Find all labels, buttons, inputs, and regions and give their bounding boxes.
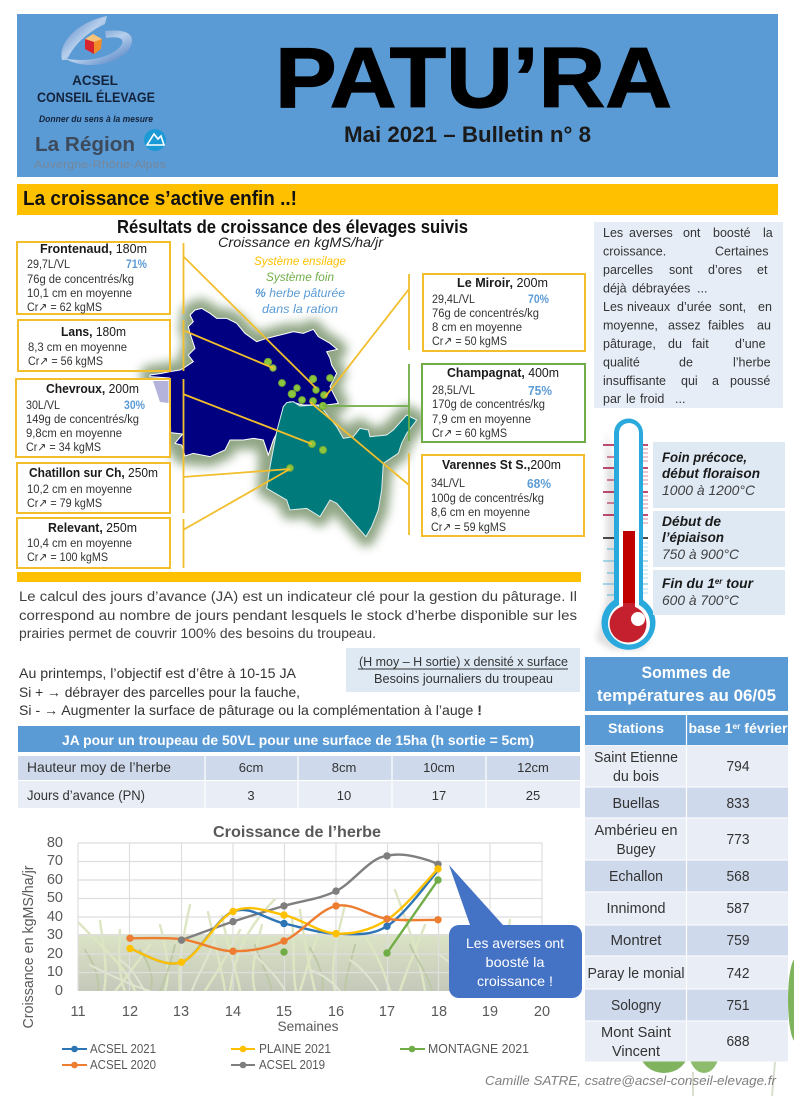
table: sommes de températures: températures au 06/05 bbox=[597, 686, 776, 705]
callout: averses: Les averses ont bbox=[466, 935, 564, 951]
farm card: Le Miroir bbox=[423, 274, 585, 351]
table: jours d'avance: Jours d’avance (PN) bbox=[27, 787, 145, 803]
farm card: Varennes St S.: 34L/VL bbox=[431, 478, 466, 490]
farm card: Le Miroir: 70% bbox=[528, 294, 549, 306]
chart legend: MONTAGNE 2021 bbox=[428, 1041, 529, 1056]
headline bar bbox=[17, 184, 778, 215]
growth stage: Fin du 1er tour: tour bbox=[722, 575, 755, 591]
growth stage: Début de l'épiaison: Début de bbox=[662, 513, 721, 529]
farm card: Lans: Cr↗ = 56 kgMS bbox=[28, 356, 103, 368]
farm card: Relevant bbox=[17, 518, 170, 568]
commentary panel: du bbox=[668, 337, 682, 351]
table: jours d'avance: Hauteur moy de l’herbe bbox=[27, 759, 171, 775]
table: sommes de températures: 587 bbox=[726, 901, 750, 917]
axis titles bbox=[21, 865, 338, 1034]
farm card: Varennes St S.: 8,6 cm en moyenne bbox=[431, 507, 530, 519]
series: ACSEL 2021 bbox=[130, 871, 438, 964]
table: jours d'avance: 25 bbox=[526, 788, 540, 803]
x axis labels: 19 bbox=[482, 1004, 498, 1020]
farm card: Le Miroir: 76g de concentrés/kg bbox=[432, 308, 539, 320]
commentary panel: sont, bbox=[719, 300, 746, 314]
table: jours d'avance: 10 bbox=[337, 788, 351, 803]
y axis labels: 10 bbox=[47, 964, 63, 980]
explanatory paragraph: Le calcul des jours d’avance (JA) est un indicateur clé pour la gestion du pâturage. Il bbox=[19, 589, 577, 604]
y axis labels: 20 bbox=[47, 946, 63, 962]
x axis labels: 15 bbox=[276, 1004, 292, 1020]
commentary panel: le bbox=[626, 392, 636, 406]
section heading: results bbox=[117, 217, 468, 250]
formula box: (H moy – H sortie) x densité x surface bbox=[359, 654, 568, 669]
divider bar bbox=[17, 572, 581, 582]
commentary panel: d’une bbox=[735, 337, 766, 351]
y axis labels: 80 bbox=[47, 835, 63, 851]
map legend bbox=[254, 254, 346, 316]
farm card: Varennes St S.: Cr↗ = 59 kgMS bbox=[431, 522, 506, 534]
growth stage: Foin précoce: 1000 à 1200°C bbox=[662, 482, 756, 498]
subtitle: Mai 2021 – Bulletin n° 8 bbox=[344, 122, 591, 147]
commentary panel: déjà bbox=[603, 282, 627, 296]
farm card: Le Miroir: Cr↗ = 50 kgMS bbox=[432, 336, 507, 348]
commentary panel: la bbox=[763, 226, 773, 240]
footer credit: Camille SATRE, csatre@acsel-conseil-elevage.fr bbox=[485, 1073, 777, 1088]
commentary panel: Les bbox=[603, 226, 623, 240]
formula box: Besoins journaliers du troupeau bbox=[374, 671, 553, 686]
grey marker at week 13 bbox=[178, 936, 185, 944]
commentary panel: croissance. bbox=[603, 244, 666, 258]
commentary panel: ... bbox=[697, 282, 707, 296]
table: sommes de températures: base 1 bbox=[688, 721, 731, 736]
farm card: Le Miroir: 8 cm en moyenne bbox=[432, 322, 522, 334]
map legend: Système ensilage bbox=[254, 254, 346, 268]
farm card: Chatillon sur Ch: Cr↗ = 79 kgMS bbox=[27, 498, 102, 510]
table: sommes de températures: 751 bbox=[726, 998, 750, 1014]
commentary panel: boosté bbox=[713, 226, 751, 240]
commentary panel: assez bbox=[668, 318, 701, 332]
commentary panel: débrayées bbox=[632, 282, 690, 296]
table: sommes de températures: Montret bbox=[610, 933, 662, 949]
chart legend bbox=[62, 1041, 529, 1072]
commentary panel: d’ores bbox=[708, 263, 742, 277]
thermometer bbox=[596, 418, 656, 650]
section heading: results: Résultats de croissance des élevages suivis bbox=[117, 217, 468, 237]
table: sommes de températures: er bbox=[732, 722, 740, 731]
gridlines bbox=[78, 843, 542, 991]
title: PATU’RA bbox=[275, 31, 672, 126]
logo: La Région Auvergne-Rhône-Alpes bbox=[34, 129, 167, 171]
section heading: results: Croissance en kgMS/ha/jr bbox=[218, 234, 384, 250]
table: sommes de températures: 688 bbox=[726, 1034, 750, 1050]
map legend: Système foin bbox=[266, 270, 334, 284]
growth stage: Foin précoce bbox=[653, 442, 785, 508]
growth stage: Fin du 1er tour: 600 à 700°C bbox=[662, 592, 740, 608]
chart legend: PLAINE 2021 bbox=[259, 1041, 331, 1056]
commentary panel: au bbox=[757, 318, 771, 332]
commentary panel: Les bbox=[603, 300, 623, 314]
growth stage: Foin précoce: début floraison bbox=[662, 465, 760, 481]
y axis labels: 70 bbox=[47, 853, 63, 869]
table: sommes de températures: février bbox=[740, 721, 788, 736]
table: jours d'avance bbox=[18, 726, 580, 808]
table: sommes de températures: 568 bbox=[726, 869, 750, 885]
commentary panel: en bbox=[758, 300, 772, 314]
farm card: Varennes St S.: 100g de concentrés/kg bbox=[431, 493, 544, 505]
series: MONTAGNE 2021 bbox=[280, 876, 442, 957]
x axis labels: 14 bbox=[225, 1004, 241, 1020]
commentary panel: Certaines bbox=[715, 244, 768, 258]
growth stage: Fin du 1er tour: Fin du 1 bbox=[662, 575, 716, 591]
commentary panel: a bbox=[712, 374, 719, 388]
farm card: Relevant: Cr↗ = 100 kgMS bbox=[27, 552, 108, 564]
commentary panel: sont bbox=[669, 263, 693, 277]
table: sommes de températures: Echallon bbox=[609, 869, 663, 885]
farm card: Champagnat: 75% bbox=[528, 383, 552, 398]
y axis labels: 60 bbox=[47, 872, 63, 888]
chart legend: ACSEL 2019 bbox=[259, 1057, 325, 1072]
y axis labels: 50 bbox=[47, 890, 63, 906]
commentary panel: ... bbox=[675, 392, 685, 406]
table: jours d'avance: 8cm bbox=[332, 760, 356, 775]
farm card: Chatillon sur Ch: 10,2 cm en moyenne bbox=[27, 484, 132, 496]
farm card: Chevroux: 149g de concentrés/kg bbox=[26, 414, 139, 426]
axis titles: Semaines bbox=[278, 1018, 338, 1034]
growth stage: Début de l'épiaison: l’épiaison bbox=[662, 529, 724, 545]
logo: ACSEL Conseil Élevage: ACSEL bbox=[72, 73, 118, 88]
chart legend: ACSEL 2021 bbox=[90, 1041, 156, 1056]
farm card: Lans: 8,3 cm en moyenne bbox=[28, 342, 127, 354]
commentary panel: qui bbox=[681, 374, 698, 388]
farm card: Frontenaud bbox=[17, 241, 170, 314]
farm card: Frontenaud: 29,7L/VL bbox=[27, 259, 71, 271]
line chart: croissance de l'herbe bbox=[21, 824, 550, 1072]
x axis labels: 11 bbox=[70, 1004, 86, 1020]
commentary panel: moyenne, bbox=[603, 318, 658, 332]
series: PLAINE 2021 bbox=[126, 865, 442, 966]
grass background bbox=[78, 890, 542, 991]
table: jours d'avance: 10cm bbox=[423, 760, 455, 775]
table: sommes de températures: Mont Saint bbox=[601, 1025, 671, 1041]
commentary panel: d’urée bbox=[677, 300, 712, 314]
farm card: Chevroux: 30% bbox=[124, 400, 145, 412]
commentary panel: froid bbox=[640, 392, 664, 406]
logo: ACSEL Conseil Élevage: CONSEIL ÉLEVAGE bbox=[37, 90, 155, 105]
callout: averses bbox=[449, 865, 582, 998]
logo: ACSEL Conseil Élevage bbox=[37, 16, 155, 124]
table: sommes de températures: 773 bbox=[726, 832, 750, 848]
table: jours d'avance: 17 bbox=[432, 788, 446, 803]
explanatory paragraph bbox=[19, 589, 577, 641]
farm card: Varennes St S.: 68% bbox=[527, 476, 551, 491]
commentary panel: niveaux bbox=[627, 300, 671, 314]
x axis labels: 12 bbox=[122, 1004, 138, 1020]
logo: La Région Auvergne-Rhône-Alpes: Auvergne-Rhône-Alpes bbox=[34, 159, 167, 171]
map legend: dans la ration bbox=[262, 302, 338, 316]
commentary panel: faibles bbox=[708, 318, 744, 332]
growth stage: Foin précoce: Foin précoce, bbox=[662, 449, 747, 465]
farm card: Chevroux: Chevroux, 200m bbox=[46, 381, 139, 396]
callout: averses: croissance ! bbox=[477, 973, 553, 989]
x axis labels: 18 bbox=[431, 1004, 447, 1020]
commentary panel: l’herbe bbox=[733, 356, 771, 370]
table: sommes de températures: Saint Etienne bbox=[594, 750, 678, 766]
objective text: Au printemps, l’objectif est d’être à 10-15 JA bbox=[19, 665, 297, 681]
headline bar: La croissance s’active enfin ..! bbox=[23, 188, 297, 210]
commentary panel: ont bbox=[683, 226, 701, 240]
farm card: Frontenaud: 76g de concentrés/kg bbox=[27, 274, 134, 286]
callout: averses: boosté la bbox=[486, 954, 545, 970]
chart title: Croissance de l’herbe bbox=[213, 824, 381, 841]
explanatory paragraph: prairies permet de couvrir 100% des besoins du troupeau. bbox=[19, 626, 376, 641]
farm card: Chevroux: 9,8cm en moyenne bbox=[26, 428, 122, 440]
farm card: Champagnat: Cr↗ = 60 kgMS bbox=[432, 428, 507, 440]
growth stage: Début de l'épiaison bbox=[653, 511, 785, 567]
axis titles: Croissance en kgMS/ha/jr bbox=[21, 865, 37, 1028]
table: sommes de températures: 742 bbox=[726, 966, 750, 982]
series: ACSEL 2019 bbox=[182, 852, 442, 940]
growth stage: Fin du 1er tour bbox=[653, 570, 785, 615]
table: jours d'avance: JA pour un troupeau de 50VL pour une surface de 15ha (h sortie = 5cm) bbox=[62, 732, 534, 748]
x axis labels: 20 bbox=[534, 1004, 550, 1020]
x axis labels: 17 bbox=[379, 1004, 395, 1020]
farm card: Frontenaud: 71% bbox=[126, 259, 147, 271]
farm card: Le Miroir: 29,4L/VL bbox=[432, 294, 476, 306]
commentary panel bbox=[594, 222, 783, 408]
table: sommes de températures: Bugey bbox=[616, 842, 656, 858]
farm card: Chevroux: 30L/VL bbox=[26, 400, 61, 412]
commentary panel: averses bbox=[629, 226, 673, 240]
map of the territory bbox=[150, 254, 417, 537]
chart legend: ACSEL 2020 bbox=[90, 1057, 156, 1072]
commentary panel: insuffisante bbox=[603, 374, 666, 388]
table: jours d'avance: 6cm bbox=[239, 760, 263, 775]
table: sommes de températures: Ambérieu en bbox=[594, 823, 678, 839]
lake showing through the card bbox=[153, 381, 168, 403]
farm card: Chatillon sur Ch: Chatillon sur Ch, 250m bbox=[29, 465, 158, 480]
farm card: Lans: Lans, 180m bbox=[61, 324, 126, 339]
table: sommes de températures: Buellas bbox=[612, 796, 660, 812]
y axis labels: 40 bbox=[47, 909, 63, 925]
farm card: Champagnat: 7,9 cm en moyenne bbox=[432, 414, 531, 426]
commentary panel: par bbox=[603, 392, 621, 406]
commentary panel: poussé bbox=[730, 374, 770, 388]
x axis labels: 13 bbox=[173, 1004, 189, 1020]
table: sommes de températures: Innimond bbox=[606, 901, 666, 917]
farm card: Chevroux: Cr↗ = 34 kgMS bbox=[26, 442, 101, 454]
connector lines bbox=[183, 243, 409, 568]
explanatory paragraph: correspond au nombre de jours pendant lesquels le stock d’herbe disponible sur les bbox=[19, 608, 577, 623]
map legend: % herbe pâturée bbox=[255, 286, 345, 300]
table: sommes de températures: 833 bbox=[726, 796, 750, 812]
farm card: Frontenaud: Frontenaud, 180m bbox=[40, 241, 147, 256]
table: sommes de températures: Stations bbox=[608, 720, 664, 736]
farm card: Le Miroir: Le Miroir, 200m bbox=[457, 275, 548, 290]
objective text: Si - → Augmenter la surface de pâturage ou la complémentation à l’auge ! bbox=[19, 702, 482, 718]
farm card: Champagnat bbox=[422, 364, 585, 442]
farm card: Lans bbox=[18, 320, 170, 371]
farm card: Chevroux bbox=[16, 379, 170, 457]
table: sommes de températures: du bois bbox=[613, 769, 659, 785]
farm card: Champagnat: 28,5L/VL bbox=[432, 385, 476, 397]
farm card: Frontenaud: 10,1 cm en moyenne bbox=[27, 288, 132, 300]
table: sommes de températures: 759 bbox=[726, 933, 750, 949]
farm card: Chatillon sur Ch bbox=[17, 463, 170, 513]
logo: La Région Auvergne-Rhône-Alpes: La Région bbox=[35, 134, 135, 156]
table: jours d'avance: 12cm bbox=[517, 760, 549, 775]
growth stage: Début de l'épiaison: 750 à 900°C bbox=[662, 546, 740, 562]
header banner bbox=[17, 14, 778, 177]
farm location dots bbox=[264, 358, 333, 471]
farm card: Relevant: Relevant, 250m bbox=[48, 520, 137, 535]
x axis labels bbox=[70, 1004, 550, 1020]
table: sommes de températures: Vincent bbox=[612, 1044, 660, 1060]
commentary panel: parcelles bbox=[603, 263, 653, 277]
logo: ACSEL Conseil Élevage: Donner du sens à la mesure bbox=[39, 114, 153, 124]
commentary panel: fait bbox=[692, 337, 709, 351]
table: sommes de températures: Sologny bbox=[611, 998, 662, 1014]
farm card: Relevant: 10,4 cm en moyenne bbox=[27, 538, 132, 550]
objective text bbox=[19, 665, 482, 718]
growth stage: Fin du 1er tour: er bbox=[715, 577, 723, 586]
farm card: Frontenaud: Cr↗ = 62 kgMS bbox=[27, 302, 102, 314]
table: sommes de températures: Paray le monial bbox=[588, 966, 684, 982]
table: sommes de températures bbox=[585, 657, 788, 1062]
y axis labels: 30 bbox=[47, 927, 63, 943]
table: jours d'avance: 3 bbox=[247, 788, 255, 803]
farm card: Varennes St S. bbox=[422, 455, 584, 536]
y axis labels bbox=[47, 835, 63, 999]
commentary panel: et bbox=[757, 263, 768, 277]
farm card: Champagnat: Champagnat, 400m bbox=[447, 365, 559, 380]
table: sommes de températures: Sommes de bbox=[642, 663, 730, 682]
commentary panel: pâturage, bbox=[603, 337, 656, 351]
objective text: Si + → débrayer des parcelles pour la fauche, bbox=[19, 684, 300, 700]
formula box bbox=[346, 648, 580, 692]
table: sommes de températures: 794 bbox=[726, 759, 750, 775]
commentary panel: de bbox=[679, 356, 693, 370]
commentary panel: qualité bbox=[603, 356, 640, 370]
y axis labels: 0 bbox=[55, 983, 63, 999]
x axis labels: 16 bbox=[328, 1004, 344, 1020]
farm card: Champagnat: 170g de concentrés/kg bbox=[432, 399, 545, 411]
decorative clover behind station table bbox=[640, 958, 794, 1096]
series: ACSEL 2020 bbox=[126, 902, 442, 955]
farm card: Varennes St S.: Varennes St S.,200m bbox=[442, 457, 561, 472]
